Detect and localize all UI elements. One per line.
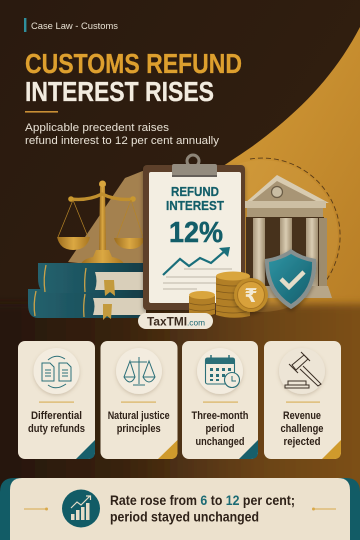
icon: rupee coin [234,278,268,312]
logo badge: TaxTMI.com: TaxTMI [147,316,187,328]
summary text: period stayed unchanged [110,508,259,524]
card: revenue challenge rejected: rejected [284,436,320,448]
icon: rupee coin: ₹ [244,285,258,307]
tag: Case Law - Customs: Case Law - Customs [31,20,118,31]
card: natural justice principles [100,341,178,459]
title: INTEREST RISES [25,76,214,107]
icon: scales [124,357,155,385]
summary panel [0,478,360,540]
card: natural justice principles: Natural justice [108,410,170,422]
card: differential duty refunds: duty refunds [28,423,85,435]
clip [172,155,217,177]
card: natural justice principles: principles [117,423,161,435]
clipboard label: refund interest [166,185,224,213]
subtitle: Applicable precedent raises [25,122,170,134]
logo badge: TaxTMI.com [138,313,213,329]
card: revenue challenge rejected: challenge [280,423,324,435]
card: three-month period unchanged: Three-month [192,410,249,422]
icon: rising bar chart [62,490,100,528]
card: three-month period unchanged [182,341,258,459]
chart arrow [163,247,230,275]
clipboard label: refund interest: REFUND [171,185,219,199]
clipboard label: refund interest: INTEREST [166,199,224,213]
title [25,48,242,107]
card: differential duty refunds [18,341,95,459]
card: differential duty refunds: Differential [31,410,82,422]
title: CUSTOMS REFUND [25,48,242,79]
clipboard [143,155,245,310]
illustration: courthouse [245,175,332,298]
subtitle: refund interest to 12 per cent annually [25,135,220,147]
subtitle [25,122,220,147]
summary text: Rate rose from 6 to 12 per cent; [110,492,295,508]
backdrop shapes [68,158,340,312]
card: three-month period unchanged: period [206,423,234,435]
card: three-month period unchanged: unchanged [196,436,244,448]
icon: shield with check [265,249,316,309]
card: revenue challenge rejected: Revenue [283,410,321,422]
illustration: coin stacks [189,272,250,318]
illustration: scales of justice [57,180,145,264]
logo badge: TaxTMI.com: .com [187,318,205,328]
icon: documents exchange [42,356,71,388]
clipboard figure: 12%: 12% [169,217,223,249]
card: revenue challenge rejected [264,341,341,459]
icon: gavel [285,352,321,388]
illustration: stacked books [28,263,146,320]
summary text [110,492,295,524]
icon: calendar and clock [206,355,240,388]
